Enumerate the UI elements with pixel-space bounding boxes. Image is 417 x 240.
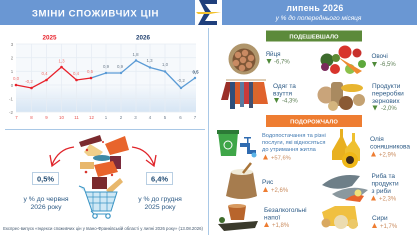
item: grain products — [318, 82, 404, 112]
data labels 2026: 0,5 — [192, 70, 199, 74]
y axis labels: 3 — [11, 42, 14, 47]
callout: month: 0,5% — [37, 174, 54, 184]
data labels 2026 — [103, 52, 199, 83]
item: rice — [226, 163, 289, 199]
item: water: Водопостачання та різні — [262, 133, 326, 139]
x axis labels — [15, 115, 197, 120]
vertical divider — [208, 28, 210, 235]
x axis labels: 7 — [194, 115, 197, 120]
item: rice: +2,6% — [271, 188, 289, 194]
icon: vegetables — [320, 46, 366, 74]
item: soft drinks: напої — [264, 214, 280, 222]
data labels 2025: 0,5 — [87, 69, 94, 74]
data labels 2025: 0,4 — [73, 71, 80, 76]
item: grain products: -2,0% — [381, 106, 397, 112]
y axis labels: 2 — [11, 56, 14, 60]
x axis labels: 4 — [149, 115, 152, 120]
icon: clothes rack — [221, 80, 268, 109]
x axis labels: 6 — [179, 115, 182, 120]
x axis labels: 12 — [89, 115, 94, 120]
item: fish: з риби — [372, 187, 391, 195]
item: vegetables: Овочі — [372, 52, 388, 60]
icon: cheese — [322, 206, 358, 229]
data labels 2026: 1,8 — [132, 52, 139, 57]
item: fish — [322, 172, 399, 202]
data labels 2025: -0,2 — [25, 79, 33, 84]
data labels 2025: 0,4 — [41, 71, 48, 76]
item: sunflower oil — [332, 129, 410, 168]
item: sunflower oil: соняшникова — [370, 144, 410, 150]
item: water: +57,6% — [271, 156, 291, 162]
y axis labels: -1 — [9, 96, 14, 102]
callout: year — [138, 172, 182, 211]
x axis labels: 3 — [134, 115, 137, 120]
y axis labels — [9, 42, 14, 115]
callout: month — [24, 172, 69, 211]
item: eggs: Яйця — [266, 50, 281, 58]
item: vegetables — [320, 46, 396, 74]
x axis labels: 11 — [74, 115, 79, 120]
icon: tea cup — [218, 204, 258, 231]
item: fish: Риба та — [372, 172, 395, 180]
icon: grains — [318, 82, 365, 111]
arrow: right — [132, 147, 156, 166]
y axis labels: -2 — [9, 110, 14, 115]
year label 2026: 2026 — [136, 34, 150, 42]
x axis labels: 7 — [15, 115, 18, 120]
item: grain products: переробки — [372, 90, 404, 98]
x axis labels: 9 — [45, 115, 48, 120]
icon: bin and tap — [217, 130, 256, 158]
item: fish: +2,3% — [379, 196, 397, 202]
banner: cheaper — [266, 30, 362, 42]
data labels 2026: 0,9 — [117, 64, 124, 69]
icon: egg basket — [228, 44, 260, 74]
item: water: послуги, які відносяться — [262, 140, 325, 146]
period heading: липень 2026 — [286, 3, 344, 13]
item: clothes: -4,3% — [282, 98, 298, 104]
logo — [196, 0, 221, 25]
icon: rice sack — [226, 163, 257, 199]
item: rice: Рис — [262, 179, 274, 186]
x axis labels: 2 — [120, 115, 123, 120]
y axis labels: 0 — [11, 83, 14, 88]
data labels 2025: 1,3 — [58, 58, 65, 64]
data labels 2026: 0,9 — [103, 64, 110, 69]
item: eggs — [228, 44, 290, 74]
item: grain products: зернових — [372, 98, 400, 105]
item: sunflower oil: Олія — [370, 135, 384, 143]
item: cheese: Сири — [372, 215, 388, 222]
banner: more expensive: ПОДОРОЖЧАЛО — [290, 120, 338, 126]
icon: shopping cart with goods — [79, 135, 129, 218]
data labels 2025 — [13, 58, 94, 84]
callout: year: 2025 року — [144, 204, 176, 211]
title: ЗМІНИ СПОЖИВЧИХ ЦІН — [32, 8, 159, 20]
x axis labels: 10 — [59, 115, 64, 120]
caption month: у % до червня — [24, 196, 69, 203]
item: eggs: -6,7% — [274, 60, 290, 66]
callout: year: 6,4% — [151, 174, 168, 184]
item: soft drinks — [218, 204, 307, 231]
series 2025 — [16, 67, 91, 88]
caption year: у % до грудня — [138, 196, 182, 203]
item: water: до утримання житла — [262, 147, 317, 153]
item: vegetables: -6,5% — [380, 62, 396, 68]
arrow: left — [50, 147, 74, 166]
icon: oil bottles — [332, 129, 360, 168]
header band: title — [0, 0, 195, 25]
item: cheese — [322, 206, 398, 230]
item: grain products: Продукти — [372, 83, 401, 90]
item: clothes — [221, 80, 298, 109]
period subtitle: у % до попереднього місяця — [275, 14, 362, 22]
item: water — [217, 130, 326, 162]
item: clothes: взуття — [273, 90, 292, 98]
item: clothes: Одяг та — [273, 83, 296, 90]
data labels 2025: 0,0 — [13, 76, 20, 81]
banner: more expensive — [266, 115, 362, 127]
plot background — [16, 44, 196, 112]
icon: fish — [322, 175, 368, 202]
callout: month: 2026 року — [30, 204, 62, 211]
item: sunflower oil: +2,9% — [379, 152, 397, 158]
data labels 2026: -0,2 — [177, 78, 185, 83]
data labels 2026: 1,0 — [162, 62, 169, 67]
data labels 2026: 1,3 — [146, 58, 153, 63]
item: soft drinks: Безалкогольні — [264, 206, 307, 214]
item: soft drinks: +1,8% — [272, 223, 290, 229]
x axis labels: 1 — [105, 115, 108, 120]
line chart — [9, 34, 199, 120]
horizontal divider — [5, 128, 205, 130]
header band: period — [222, 0, 417, 25]
banner: cheaper: ПОДЕШЕВШАЛО — [289, 34, 339, 40]
source note: Експрес-випуск «Індекси споживчих цін у Івано-Франківській області у липні 2026 року» (13.08.2026) — [3, 226, 203, 231]
year label 2025: 2025 — [42, 34, 57, 42]
x axis labels: 8 — [30, 115, 33, 120]
y axis labels: 1 — [11, 69, 14, 74]
series 2026 — [91, 60, 195, 88]
item: cheese: +1,7% — [380, 224, 398, 230]
item: fish: продукти — [372, 180, 399, 188]
x axis labels: 5 — [164, 115, 167, 120]
